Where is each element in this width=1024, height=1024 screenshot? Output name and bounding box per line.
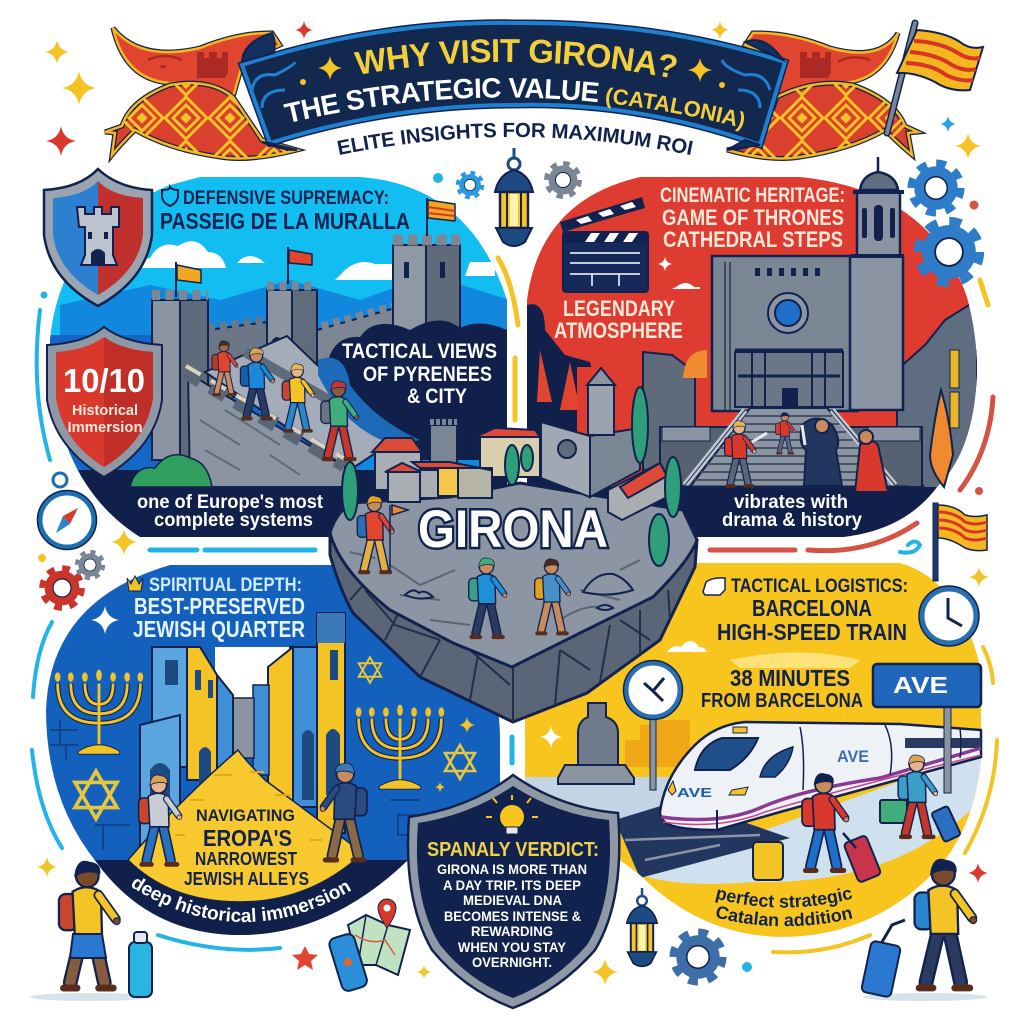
callout: 38 minutes: FROM BARCELONA (701, 690, 863, 712)
callout: 38 minutes (701, 665, 863, 712)
text: legendary atmosphere: LEGENDARY (563, 296, 675, 321)
sign: AVE station (873, 664, 981, 793)
callout: tactical views: & CITY (407, 385, 467, 408)
caption: strategic addition: Catalan addition (716, 906, 852, 926)
panel: cinematic heritage (520, 157, 985, 547)
decorative arcs and dashes (32, 258, 997, 952)
title line two: THE STRATEGIC VALUE (283, 78, 599, 122)
train: AVE (677, 785, 712, 800)
callout: narrowest alleys: NARROWEST (195, 849, 297, 869)
compass (38, 473, 96, 550)
cathedral (660, 157, 922, 487)
text: legendary atmosphere (554, 296, 683, 343)
flag right middle (933, 503, 987, 581)
spark on yellow (540, 726, 562, 748)
callout: 38 minutes: 38 MINUTES (730, 665, 850, 691)
heading: defensive supremacy: PASSEIG DE LA MURALLA (160, 208, 410, 234)
subtitle: ELITE INSIGHTS FOR MAXIMUM ROI (337, 122, 693, 155)
badge: 10/10 historical immersion (47, 327, 162, 477)
heading: spiritual depth: SPIRITUAL DEPTH: (149, 575, 302, 596)
heading: spiritual depth: JEWISH QUARTER (133, 616, 305, 642)
red star (292, 946, 318, 970)
verdict heading: SPANALY VERDICT: (427, 839, 599, 861)
clock icon (919, 586, 979, 646)
heading: spiritual depth (127, 575, 305, 642)
icon: castle shield (44, 169, 152, 306)
walkers in alley (139, 763, 367, 864)
heading: spiritual depth: BEST-PRESERVED (134, 593, 305, 619)
brick marks (50, 720, 430, 850)
callout: tactical views: TACTICAL VIEWS (342, 340, 497, 363)
caption: drama and history: vibrates with (734, 492, 848, 513)
decorative dots (38, 173, 983, 972)
clapperboard icon (560, 197, 648, 292)
caption: strategic addition (715, 888, 852, 926)
panel: tactical logistics (525, 563, 982, 937)
heading: tactical logistics (703, 576, 908, 645)
central rock: Girona (330, 368, 697, 722)
verdict body: BECOMES INTENSE & (444, 908, 581, 924)
icon: menorah left (55, 670, 143, 754)
panel caption: complete systems: complete systems (154, 510, 313, 531)
panel caption: complete systems (137, 492, 324, 531)
panel: spiritual depth (46, 565, 500, 935)
hikers on rock (357, 496, 571, 637)
heading: cinematic heritage: CATHEDRAL STEPS (663, 227, 843, 252)
icons: stars of david (75, 606, 475, 819)
map and bottle (328, 899, 410, 993)
main banner title (238, 19, 790, 151)
callout: narrowest alleys: NAVIGATING (196, 806, 295, 825)
sword fighters (725, 412, 888, 492)
caption: drama and history: drama & history (722, 510, 862, 531)
caption: strategic addition: perfect strategic (715, 888, 852, 908)
village houses (372, 368, 667, 520)
right banner ribbon (727, 33, 918, 158)
lantern bottom (627, 888, 657, 966)
icon: menorah right (356, 705, 444, 789)
shield: verdict (408, 775, 619, 1008)
heading: defensive supremacy (160, 187, 410, 234)
verdict body: GIRONA IS MORE THAN (437, 861, 587, 877)
orange pennant (930, 390, 953, 487)
verdict body (437, 861, 587, 970)
panel caption: complete systems: one of Europe's most (137, 492, 324, 513)
train (660, 722, 981, 830)
patch of hillside (318, 358, 420, 445)
text: legendary atmosphere: ATMOSPHERE (554, 318, 683, 343)
hanging lantern top (495, 148, 533, 246)
heading: cinematic heritage: CINEMATIC HERITAGE: (660, 184, 845, 207)
heading: tactical logistics: TACTICAL LOGISTICS: (731, 576, 908, 597)
callout: narrowest alleys: EROPA'S (203, 825, 292, 851)
hikers on wall (212, 341, 359, 459)
heading: cinematic heritage: GAME OF THRONES (662, 205, 844, 230)
castle wall (130, 198, 460, 487)
statue monument (558, 703, 634, 784)
title line three: (CATALONIA) (606, 88, 744, 132)
label: GIRONA: GIRONA (418, 500, 608, 559)
heading: defensive supremacy: DEFENSIVE SUPREMACY: (183, 188, 389, 209)
decorative gears (43, 164, 979, 981)
verdict body: A DAY TRIP. ITS DEEP (443, 877, 581, 893)
traveller bottom left (30, 861, 152, 1001)
cypress trees (342, 387, 681, 566)
badge: 10/10 historical immersion: 10/10 (63, 362, 145, 399)
small spark and cloud in red panel (658, 257, 672, 271)
icon: light bulb (486, 795, 538, 834)
clock on post (624, 660, 682, 790)
sign: AVE station: AVE (893, 672, 948, 698)
caption: deep historical immersion: deep historical immersion (132, 878, 351, 922)
flag top right (887, 23, 983, 133)
title line one: WHY VISIT GIRONA? (354, 39, 677, 78)
badge: 10/10 historical immersion: Historical (72, 402, 138, 419)
callout: tactical views (342, 340, 497, 408)
callout: narrowest alleys (184, 806, 309, 889)
caption: drama and history (722, 492, 862, 531)
verdict body: OVERNIGHT. (472, 954, 552, 970)
verdict body: WHEN YOU STAY (458, 939, 567, 955)
traveller bottom right (861, 859, 987, 1001)
verdict body: MEDIEVAL DNA (463, 892, 562, 908)
left banner ribbon (105, 28, 297, 158)
panel: defensive supremacy (40, 170, 515, 545)
heading: tactical logistics: BARCELONA (752, 595, 872, 621)
callout: tactical views: OF PYRENEES (363, 363, 492, 386)
travellers on platform (753, 755, 961, 883)
heading: tactical logistics: HIGH-SPEED TRAIN (717, 619, 907, 645)
navy backdrop for tactical views (326, 320, 507, 460)
callout: narrowest alleys: JEWISH ALLEYS (184, 869, 309, 889)
badge: 10/10 historical immersion: Immersion (68, 419, 142, 436)
train: AVE (837, 747, 869, 766)
verdict body: REWARDING (471, 923, 553, 939)
heading: cinematic heritage (660, 184, 845, 252)
